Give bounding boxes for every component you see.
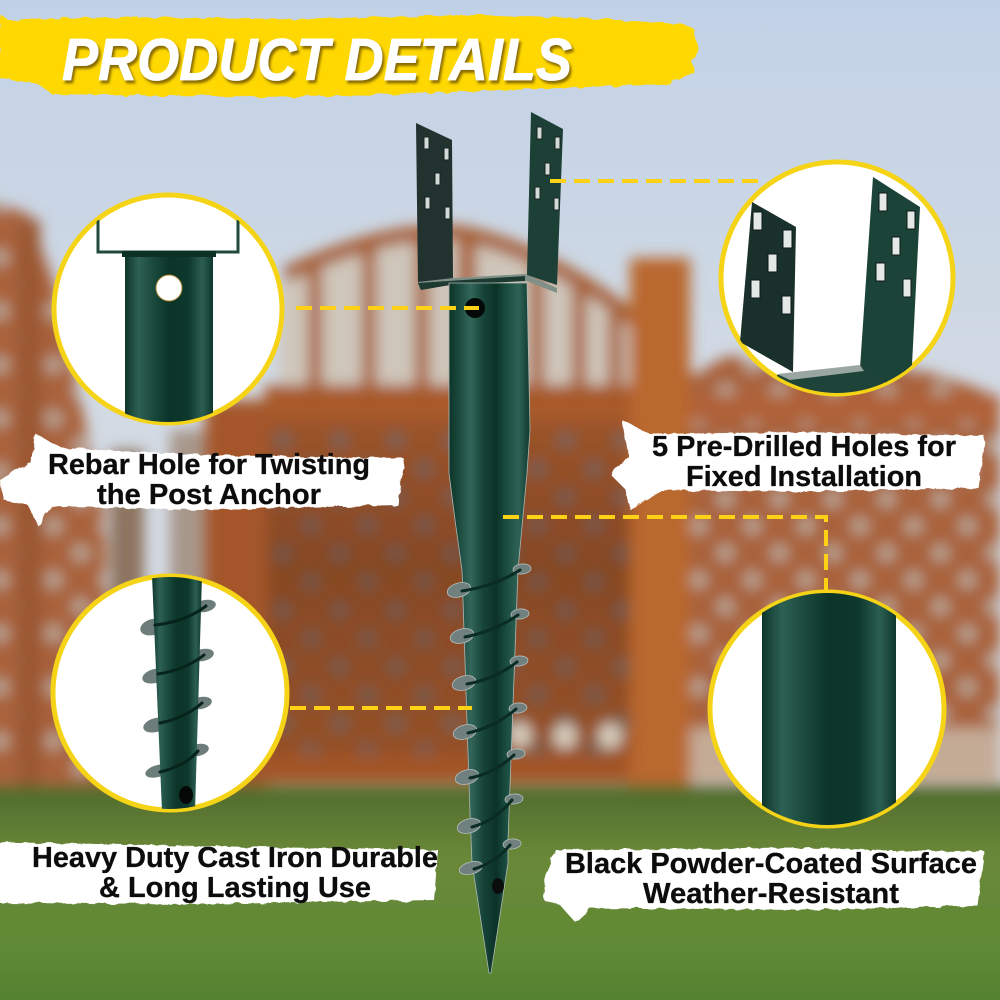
lawn <box>0 785 1000 1000</box>
screw flights <box>446 563 531 877</box>
caption: pre-drilled holes: Fixed Installation <box>686 461 922 493</box>
U bracket <box>416 123 453 284</box>
title banner <box>0 14 698 97</box>
caption: cast iron: Heavy Duty Cast Iron Durable <box>32 842 438 874</box>
caption: powder coated <box>544 848 985 922</box>
caption: pre-drilled holes: 5 Pre-Drilled Holes for <box>652 431 956 463</box>
caption: pre-drilled holes <box>612 420 985 510</box>
left lattice <box>0 195 110 800</box>
title text: PRODUCT DETAILS <box>62 27 572 93</box>
shaft <box>449 283 530 973</box>
detail circle: rebar hole <box>54 195 282 426</box>
detail circle: screw tip <box>53 575 287 812</box>
caption: cast iron: & Long Lasting Use <box>99 872 371 904</box>
caption: rebar hole: the Post Anchor <box>97 479 321 511</box>
dashed leader lines <box>290 181 826 708</box>
caption: rebar hole: Rebar Hole for Twisting <box>48 449 370 481</box>
caption: powder coated: Black Powder-Coated Surface <box>565 848 977 880</box>
caption: cast iron <box>0 842 438 904</box>
main product: ground screw post anchor <box>416 112 563 973</box>
central arch fence <box>280 231 645 400</box>
caption: powder coated: Weather-Resistant <box>643 878 899 910</box>
detail circle: coated surface <box>710 590 944 830</box>
detail circle: bracket holes <box>721 162 953 400</box>
caption: rebar hole <box>0 434 404 526</box>
right lattice <box>690 350 1000 780</box>
